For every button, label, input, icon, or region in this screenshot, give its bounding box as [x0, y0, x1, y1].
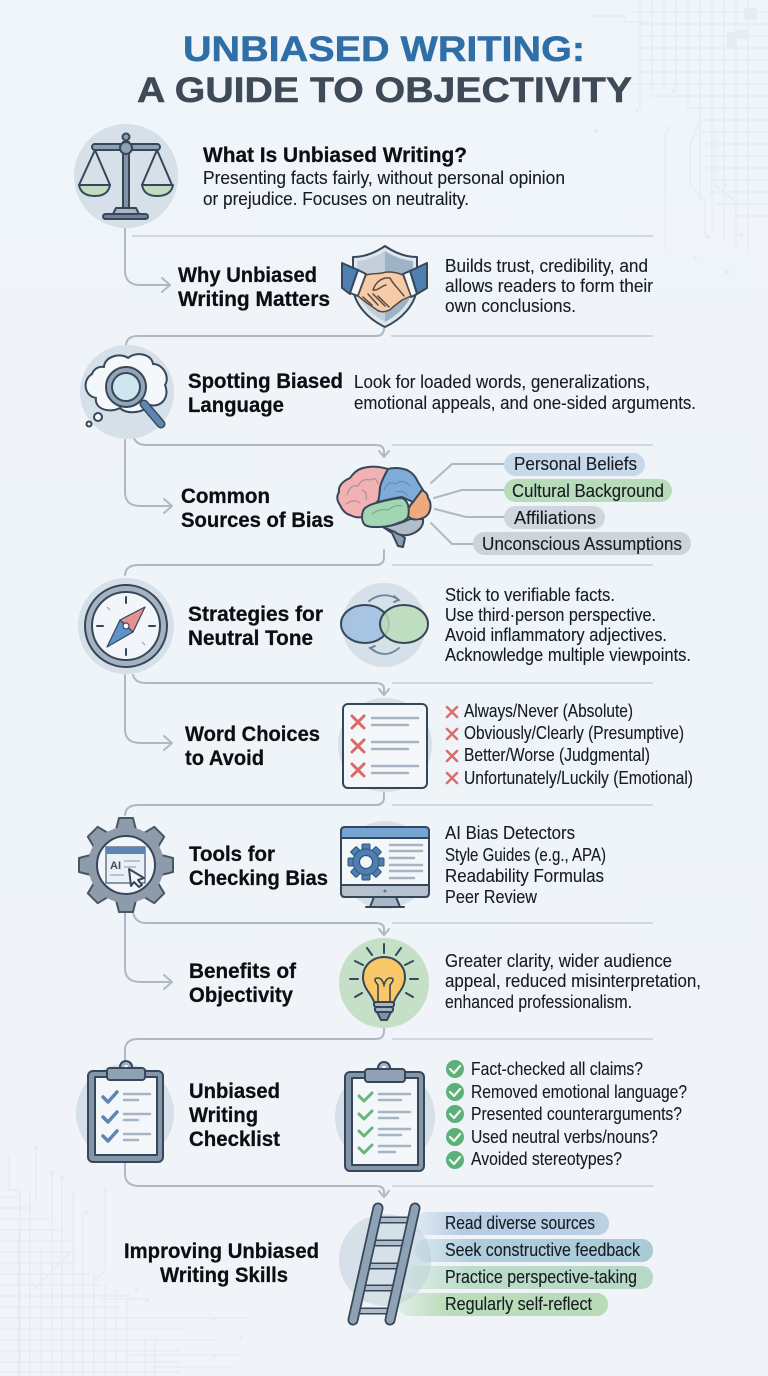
heading: Tools for: [189, 843, 275, 866]
heading: What Is Unbiased Writing?: [203, 144, 467, 167]
heading: Checking Bias: [189, 867, 328, 890]
panel: what is unbiased writing: [74, 124, 565, 228]
heading: Neutral Tone: [188, 627, 313, 650]
heading: [185, 723, 320, 770]
tag: cultural background: Cultural Background: [512, 481, 664, 501]
description: [354, 372, 696, 413]
heading: Checklist: [189, 1128, 280, 1151]
heading: Writing Skills: [160, 1264, 288, 1287]
icon: monitor with gear: [341, 821, 429, 909]
description: Stick to verifiable facts.: [445, 585, 615, 605]
list of words to avoid: Unfortunately/Luckily (Emotional): [464, 768, 693, 788]
icon: balance scale: [74, 124, 178, 228]
heading: [189, 843, 328, 890]
description: Greater clarity, wider audience: [445, 951, 672, 971]
description: [445, 951, 701, 1012]
icon: magnifier in thought cloud: [80, 345, 174, 439]
description: [203, 168, 565, 209]
heading: Sources of Bias: [181, 509, 334, 532]
checklist items: Avoided stereotypes?: [471, 1149, 622, 1169]
checklist items: Fact-checked all claims?: [471, 1059, 643, 1079]
description: appeal, reduced misinterpretation,: [445, 971, 701, 991]
panel: word choices to avoid: [185, 698, 693, 792]
panel: benefits of objectivity: [189, 938, 701, 1028]
heading: [188, 603, 323, 650]
icon: gear with AI window: [79, 818, 173, 912]
list of words to avoid: [447, 701, 693, 788]
icon: clipboard with blue checks: [76, 1061, 174, 1162]
list of tools: Readability Formulas: [445, 866, 604, 886]
heading: [189, 1080, 280, 1151]
heading: [181, 485, 334, 532]
icon: light bulb: [339, 938, 429, 1028]
connectors to sources: [431, 464, 504, 544]
list of tools: AI Bias Detectors: [445, 823, 575, 843]
heading: Why Unbiased: [178, 264, 317, 287]
panel: unbiased writing checklist: [76, 1059, 687, 1171]
panel: tools for checking bias: [79, 818, 606, 912]
description: [445, 256, 653, 316]
icon: brain: [337, 467, 431, 547]
heading: Improving Unbiased: [124, 1240, 319, 1263]
heading: Strategies for: [188, 603, 323, 626]
description: Acknowledge multiple viewpoints.: [445, 645, 691, 665]
description: Use third·person perspective.: [445, 605, 656, 625]
heading: [178, 264, 330, 311]
heading: Language: [188, 394, 284, 417]
title: [137, 30, 632, 110]
checklist items: Removed emotional language?: [471, 1082, 687, 1102]
heading: Writing Matters: [178, 288, 330, 311]
panel: spotting biased language: [80, 345, 696, 439]
panel: strategies for neutral tone: [78, 578, 691, 674]
connector lines: [125, 228, 654, 1197]
icon: shield handshake: [342, 246, 427, 327]
skill bars: Seek constructive feedback: [445, 1240, 641, 1260]
list of words to avoid: Obviously/Clearly (Presumptive): [464, 723, 684, 743]
description: allows readers to form their: [445, 276, 653, 296]
heading: [188, 370, 343, 417]
skill bars: Regularly self-reflect: [445, 1294, 592, 1314]
tag: personal beliefs: Personal Beliefs: [514, 454, 637, 474]
list of tools: [445, 823, 606, 907]
description: emotional appeals, and one-sided arguments.: [354, 393, 696, 413]
description: own conclusions.: [445, 296, 576, 316]
list of words to avoid: Better/Worse (Judgmental): [464, 745, 650, 765]
skill bars: Read diverse sources: [445, 1213, 595, 1233]
icon backdrop: [339, 1214, 431, 1306]
panel: improving unbiased writing skills: [124, 1208, 653, 1320]
description: or prejudice. Focuses on neutrality.: [203, 189, 469, 209]
heading: to Avoid: [185, 747, 264, 770]
checklist items: Used neutral verbs/nouns?: [471, 1127, 658, 1147]
heading: Common: [181, 485, 270, 508]
checklist items: [446, 1059, 687, 1169]
list of tools: Style Guides (e.g., APA): [445, 845, 606, 865]
list of tools: Peer Review: [445, 887, 538, 907]
skill bars: Practice perspective-taking: [445, 1267, 637, 1287]
panel: common sources of bias: [181, 453, 691, 555]
description: Look for loaded words, generalizations,: [354, 372, 650, 392]
heading: Spotting Biased: [188, 370, 343, 393]
icon: overlapping circles: [341, 583, 428, 667]
description: [445, 585, 691, 665]
panel: why unbiased writing matters: [178, 246, 653, 327]
description: Builds trust, credibility, and: [445, 256, 648, 276]
title: UNBIASED WRITING:: [183, 30, 585, 69]
heading: Objectivity: [189, 984, 293, 1007]
list of words to avoid: Always/Never (Absolute): [464, 701, 633, 721]
icon: crossed-out list: [338, 698, 432, 792]
description: Avoid inflammatory adjectives.: [445, 625, 667, 645]
description: Presenting facts fairly, without personal opinion: [203, 168, 565, 188]
heading: Unbiased: [189, 1080, 280, 1103]
heading: Benefits of: [189, 960, 297, 983]
tag: affiliations: Affiliations: [514, 508, 596, 528]
tag: unconscious assumptions: Unconscious Assumptions: [482, 534, 682, 554]
icon: clipboard with green checks: [335, 1062, 435, 1171]
heading: [189, 960, 297, 1007]
icon: compass: [78, 578, 174, 674]
description: enhanced professionalism.: [445, 992, 632, 1012]
heading: [124, 1240, 319, 1287]
heading: Writing: [189, 1104, 258, 1127]
icon: gear with AI window: AI: [110, 860, 121, 872]
title: A GUIDE TO OBJECTIVITY: [137, 71, 632, 110]
heading: Word Choices: [185, 723, 320, 746]
icon: ladder: [353, 1208, 415, 1320]
skill bars: [398, 1212, 653, 1316]
checklist items: Presented counterarguments?: [471, 1104, 682, 1124]
